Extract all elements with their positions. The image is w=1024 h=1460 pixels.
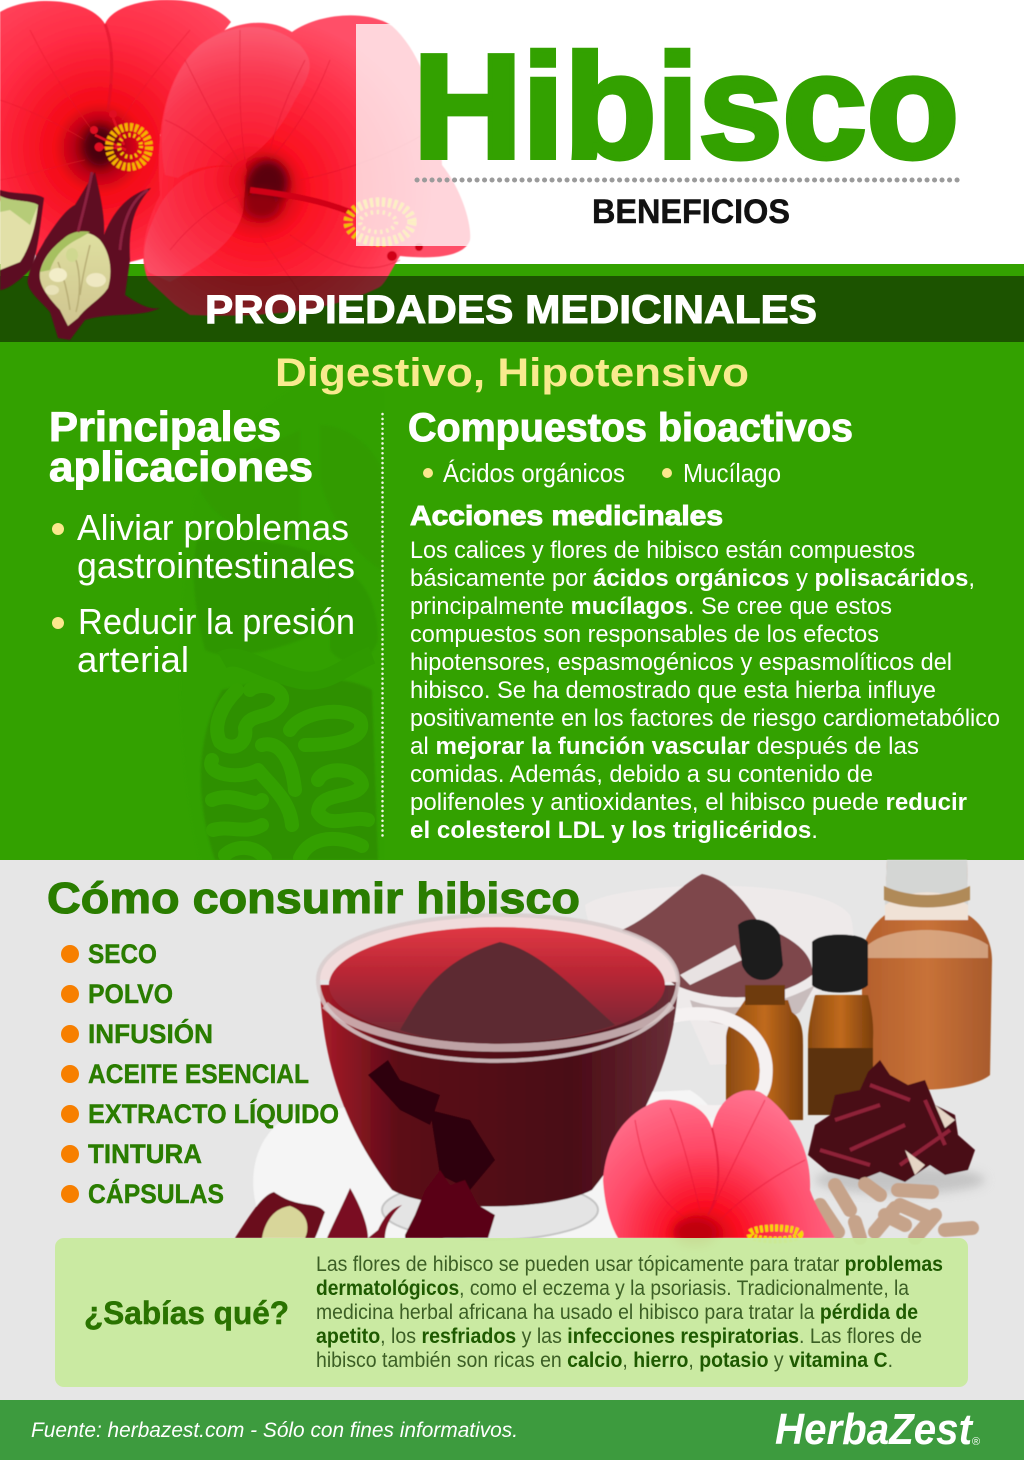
- body silhouette: [181, 385, 382, 860]
- callout text: hibisco también son ricas en calcio, hierro, potasio y vitamina C.: [316, 1349, 893, 1372]
- item: essential oil: ACEITE ESENCIAL: [88, 1059, 309, 1089]
- right flower: [143, 15, 470, 316]
- panel: main applications: [49, 403, 355, 680]
- heading: medicinal properties: PROPIEDADES MEDICINALES: [205, 288, 817, 332]
- text: medicinal actions paragraph: el colesterol LDL y los triglicéridos.: [410, 817, 818, 844]
- heading: main applications: aplicaciones: [49, 443, 313, 490]
- application 2: Reducir la presión: [78, 601, 355, 642]
- dried hibiscus pile: [808, 1060, 985, 1194]
- heading: how to consume hibiscus: Cómo consumir hibisco: [47, 874, 580, 923]
- logo: HerbaZest: HerbaZest: [775, 1405, 974, 1454]
- heading: main applications: Principales: [49, 403, 281, 450]
- subheading: digestive, hypotensive: Digestivo, Hipotensivo: [275, 351, 749, 395]
- text: medicinal actions paragraph: al mejorar la función vascular después de las: [410, 733, 919, 760]
- panel: how to consume background: [0, 860, 1024, 1400]
- footer: [0, 1400, 1024, 1460]
- cup base: [382, 1180, 598, 1240]
- source note: Fuente: herbazest.com - Sólo con fines informativos.: [31, 1419, 518, 1442]
- illustration: hibiscus calyx pods: [0, 172, 160, 340]
- illustration: tea cup, powder, bottles and dried hibiscus: [235, 860, 992, 1246]
- text: medicinal actions paragraph: básicamente por ácidos orgánicos y polisacáridos,: [410, 565, 975, 592]
- dark petals in cup: [368, 1060, 495, 1190]
- text: medicinal actions paragraph: [410, 537, 1000, 844]
- title: Hibisco: [413, 24, 959, 190]
- panel: bioactive compounds: [408, 406, 1000, 844]
- dropper amber bottle: [680, 919, 803, 1120]
- callout text: [316, 1253, 943, 1372]
- left flower: [0, 0, 231, 262]
- item: powder: POLVO: [88, 979, 173, 1009]
- center cut pod with sepals: [28, 172, 160, 340]
- dark heading band: [0, 276, 1024, 342]
- subtitle: BENEFICIOS: [592, 193, 790, 231]
- text: medicinal actions paragraph: Los calices y flores de hibisco están compuestos: [410, 537, 915, 564]
- left cut pod: [0, 190, 44, 290]
- application 1: gastrointestinales: [77, 545, 355, 586]
- heading: medicinal actions: Acciones medicinales: [410, 500, 723, 531]
- heading: main applications: [49, 403, 313, 490]
- application 1: [52, 507, 355, 586]
- text: medicinal actions paragraph: polifenoles y antioxidantes, el hibisco puede reducir: [410, 789, 967, 816]
- callout heading: ¿Sabías qué?: [84, 1295, 289, 1331]
- text: medicinal actions paragraph: compuestos son responsables de los efectos: [410, 621, 879, 648]
- text: medicinal actions paragraph: hibisco. Se ha demostrado que esta hierba influye: [410, 677, 936, 704]
- footer background: [0, 1400, 1024, 1460]
- item: infusion: INFUSIÓN: [88, 1018, 213, 1049]
- glass cup body with tea: [320, 985, 678, 1206]
- text: medicinal actions paragraph: principalmente mucílagos. Se cree que estos: [410, 593, 892, 620]
- item: dried: [61, 939, 157, 969]
- colon arc: [222, 655, 372, 681]
- heading: bioactive compounds: Compuestos bioactivos: [408, 406, 853, 450]
- compound: organic acids: Ácidos orgánicos: [443, 458, 625, 488]
- application 1: Aliviar problemas: [77, 507, 349, 548]
- item: dried: SECO: [88, 939, 157, 969]
- small amber bottle: [808, 934, 873, 1115]
- callout background: [55, 1238, 968, 1387]
- powder bowl: [585, 874, 853, 1065]
- intestines: [211, 686, 368, 858]
- fresh hibiscus flower: [603, 1090, 835, 1246]
- text: medicinal actions paragraph: comidas. Además, debido a su contenido de: [410, 761, 873, 788]
- panel: green medicinal properties background: [0, 264, 1024, 860]
- illustration: red hibiscus flowers: [0, 0, 470, 316]
- calyx pods near the cup: [235, 1188, 402, 1238]
- item: liquid extract: EXTRACTO LÍQUIDO: [88, 1098, 339, 1129]
- list: consumption forms: [61, 939, 339, 1209]
- text: medicinal actions paragraph: positivamente en los factores de riesgo cardiometabólico: [410, 705, 1000, 732]
- item: capsules: CÁPSULAS: [88, 1178, 224, 1209]
- empty glass above tea: [318, 915, 678, 982]
- glass cup handle: [660, 1014, 766, 1112]
- text: medicinal actions paragraph: hipotensores, espasmogénicos y espasmolíticos del: [410, 649, 952, 676]
- liver and stomach: [194, 539, 342, 655]
- illustration: faint digestive system: [181, 385, 382, 860]
- application 2: arterial: [77, 639, 189, 680]
- saucer: [253, 1090, 726, 1238]
- glass rim: [318, 915, 678, 1061]
- dotted title divider: [417, 178, 958, 182]
- tea surface: [329, 927, 665, 1043]
- intestine mass: [201, 678, 378, 860]
- application 2: [52, 601, 355, 680]
- item: tincture: TINTURA: [88, 1139, 202, 1169]
- callout text: apetito, los resfriados y las infecciones respiratorias. Las flores de: [316, 1325, 922, 1348]
- capsules: [820, 1184, 972, 1238]
- panel: did you know callout: [55, 1238, 968, 1387]
- callout text: medicina herbal africana ha usado el hibisco para tratar la pérdida de: [316, 1301, 918, 1324]
- dried hibiscus near cup base: [405, 1170, 495, 1238]
- tea bag and petals in the tea: [400, 942, 615, 1043]
- large syrup jar: [862, 860, 992, 1090]
- lungs: [200, 425, 382, 570]
- callout text: Las flores de hibisco se pueden usar tópicamente para tratar problemas: [316, 1253, 943, 1276]
- compound: mucilage: Mucílago: [683, 458, 781, 488]
- registered mark: ®: [972, 1436, 980, 1448]
- callout text: dermatológicos, como el eczema y la psoriasis. Tradicionalmente, la: [316, 1277, 909, 1300]
- translucent white panel behind title: [356, 24, 480, 246]
